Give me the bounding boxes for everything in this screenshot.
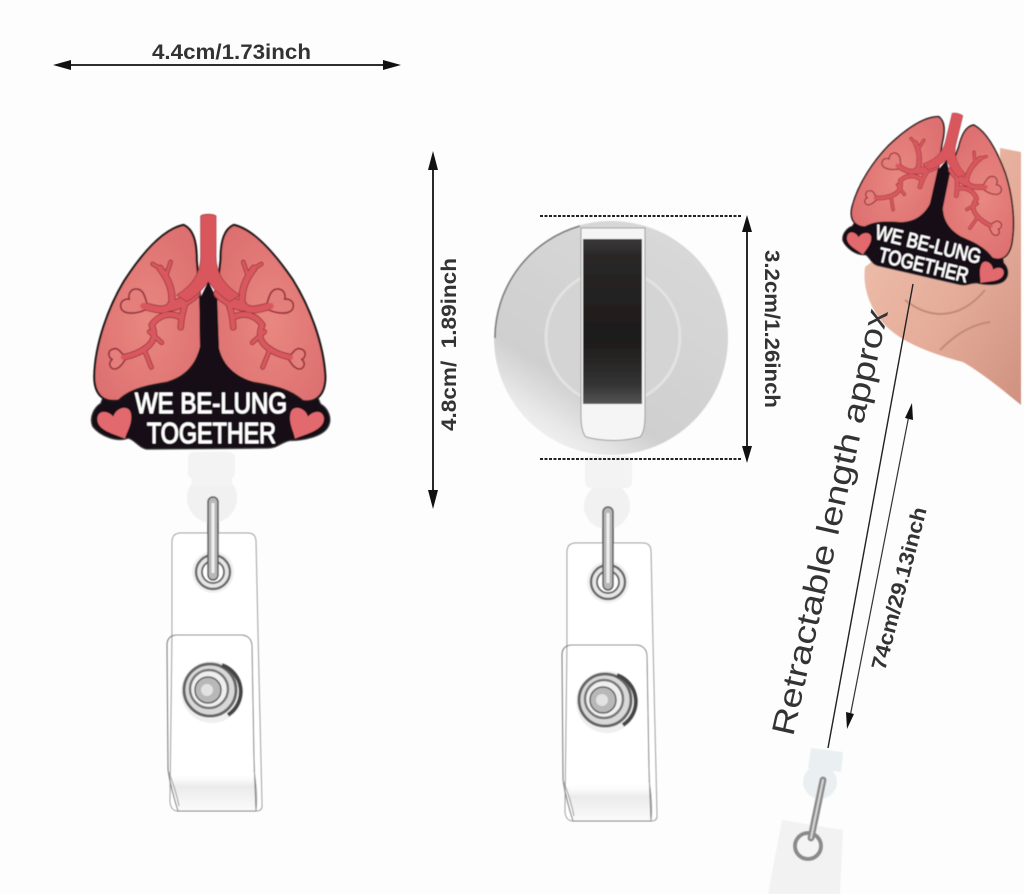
dimension: width 4.4cm [53,41,401,70]
pin slogan [135,388,287,450]
lung pin held in hand [838,94,1024,296]
lung pin held in hand: TOGETHER [876,244,971,287]
pin slogan: TOGETHER [147,418,276,450]
lung pin held in hand: WE BE-LUNG [873,221,983,269]
dimension: width 4.4cm: 4.4cm/1.73inch [152,41,311,64]
label: retractable length: Retractable length approx [765,305,895,739]
badge clip strap [167,497,262,811]
dimension: reel diameter 3.2cm [540,215,783,463]
dimension: height 4.8cm: 4.8cm/ 1.89inch [438,258,461,431]
dimension: 74cm length: 74cm/29.13inch [868,505,932,672]
dimension: reel diameter 3.2cm: 3.2cm/1.26inch [760,250,783,408]
round reel body [494,221,728,455]
retractor neck and swivel [187,452,237,523]
dimension: 74cm length [846,403,932,729]
dimension: height 4.8cm [428,151,461,509]
badge clip strap [562,507,657,821]
retract cord line [828,284,913,748]
hand [864,148,1021,405]
belt clip [581,228,645,440]
pin slogan: WE BE-LUNG [135,388,287,420]
lung pin artwork [91,214,330,449]
badge: reel back view [494,221,728,821]
hand holding pin [838,94,1024,405]
badge: lung pin front view [91,214,330,811]
pulled-out clip at cord end [768,748,843,894]
retractor neck and swivel [584,456,632,529]
